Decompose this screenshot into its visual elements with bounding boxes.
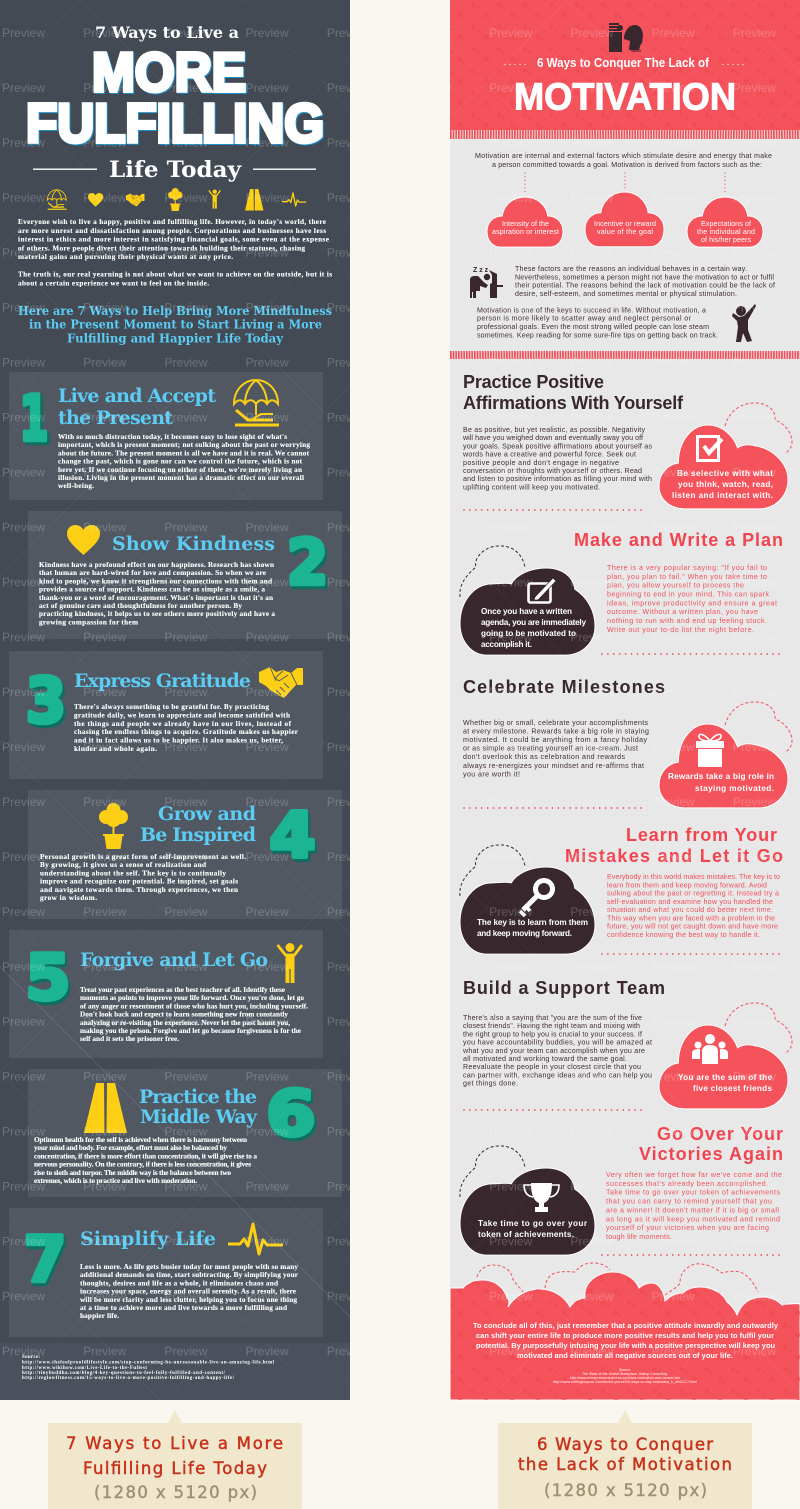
cloud callout (659, 403, 792, 509)
factors text (477, 265, 775, 339)
heading (565, 825, 783, 866)
icon: pulse (228, 1224, 283, 1254)
section: support team (462, 978, 792, 1110)
body text: Everybody in this world makes mistakes. The key is to (607, 873, 780, 881)
body text: are a winner! It doesn't matter if it is big or small (606, 1206, 779, 1214)
cloud callout: token of achievements. (478, 1230, 574, 1239)
cloud: expectations: of his/her peers (701, 236, 751, 244)
heading: Practice the (139, 1086, 257, 1108)
sources: http://www.wikihow.com/Live-Life-to-the-Fullest (22, 1366, 147, 1371)
body text: Write out your to-do list the night before. (607, 626, 754, 634)
title (505, 56, 746, 118)
intro text: material gains and pursuing their physical wants at any price. (18, 253, 233, 261)
cloud callout: Be selective with what (677, 469, 773, 478)
body text: beginning to end in your mind. This can spark (607, 590, 769, 598)
cloud callout: Once you have a written (481, 607, 572, 616)
icon: umbrella (234, 380, 279, 425)
body text: Treat your past experiences as the best teacher of all. Identify these (80, 986, 285, 994)
body text: making you the prison. Forgive and let go because forgiveness is for the (80, 1027, 301, 1035)
body text: situation and what you could do better next time. (607, 906, 773, 914)
footer clouds (450, 1263, 800, 1400)
body text: that human are hard-wired for love and compassion. So when we are (39, 569, 266, 577)
icon: heart (67, 525, 100, 555)
body text: Personal growth is a great form of self-improvement as well. (40, 853, 246, 861)
sources: Source: (22, 1355, 40, 1360)
body text: Less is more. As life gets busier today for most people with so many (80, 1263, 298, 1271)
caption: left: Fulfilling Life Today (83, 1459, 267, 1478)
cloud callout: You are the sum of the (678, 1073, 772, 1082)
body text: additional demands on time, start subtracting. By simplifying your (80, 1271, 299, 1279)
body text: Whether big or small, celebrate your accomplishments (463, 719, 648, 727)
sub heading: Here are 7 Ways to Help Bring More Mindfulness (18, 304, 332, 318)
cloud callout: Rewards take a big role in (668, 772, 774, 781)
sources: http://www.entrepreneurbusiness.com/lack-motivation-and-causes.htm (570, 1376, 680, 1380)
body text: will have you weighed down and eventually sway you off (462, 434, 643, 442)
icon: group of people (692, 1034, 728, 1064)
body text: Kindness have a profound effect on our happiness. Research has shown (39, 561, 274, 569)
body text: understanding about the self. The key is to continually (40, 869, 226, 877)
cloud: incentive: value of the goal (597, 228, 653, 236)
body text (463, 719, 649, 778)
conclusion text: potential. By purposefully infusing your life with a positive perspective will keep you (476, 1341, 775, 1350)
factors text: professional goals. Even the most strong willed people can lose steam (477, 323, 709, 331)
intro text: Everyone wish to live a happy, positive and fulfilling life. However, in today's world, there (18, 218, 326, 226)
icon: tree (99, 803, 128, 849)
body text: kind to people, we know it strengthens our connections with them and (39, 577, 272, 585)
sources: http://www.thefoolproofdlifestyle.com/stop-conforming-be-unreasonable-live-an-amazing-life.html (22, 1360, 275, 1366)
factors text: Nevertheless, sometimes a person might not have the motivation to act or fulfil (515, 273, 774, 281)
title: 6 Ways to Conquer The Lack of (537, 56, 710, 70)
cloud callout (460, 546, 595, 655)
cloud: expectations: the individual and (697, 228, 755, 236)
icon: jumping person (732, 304, 756, 342)
body text: increases your space, energy and overall serenity. As a result, there (80, 1288, 296, 1296)
cloud callout (659, 702, 792, 808)
body text: grow in wisdom. (40, 894, 97, 902)
body text: moments as points to improve your life forward. Once you're done, let go (80, 994, 304, 1002)
heading: Practice Positive (463, 372, 604, 392)
body text: get things done. (463, 1080, 518, 1088)
body text: There is a very popular saying: "If you fail to (607, 564, 767, 572)
title (26, 23, 325, 183)
cloud callout: staying motivated. (695, 784, 774, 793)
body text: There's also a saying that "you are the sum of the five (463, 1014, 642, 1022)
panel: step 7 (9, 1208, 323, 1337)
body text: Very often we forget how far we've come and the (606, 1171, 782, 1179)
caption: right (498, 1410, 752, 1509)
body text: With so much distraction today, it becomes easy to lose sight of what's (58, 433, 287, 441)
caption: left: (1280 x 5120 px) (94, 1483, 257, 1502)
factors text: their potential. The reasons behind the lack of motivation could be the lack of (515, 282, 775, 290)
body text: important, which is present moment; not sulking about the past or worrying (58, 441, 310, 449)
body text: all motivated and working toward the same goal. (463, 1055, 627, 1063)
caption: right: 6 Ways to Conquer (537, 1435, 713, 1454)
cloud: intensity (487, 197, 563, 247)
number 4: 4 (270, 799, 316, 872)
sources: Source: (619, 1368, 631, 1372)
icon: sleeping at desk: Z z z (473, 267, 489, 274)
body text: tough life moments. (606, 1233, 672, 1241)
number 5: 5 (28, 944, 72, 1017)
icon: person (278, 943, 302, 983)
body text: Optimum health for the self is achieved when there is harmony between (34, 1136, 247, 1144)
heading (463, 372, 684, 413)
body text (40, 853, 246, 902)
number 5: 5 (26, 941, 70, 1014)
number 6: 6 (266, 1077, 316, 1150)
body text: don't overlook this as celebration and rewards (463, 753, 625, 761)
body text: can partner with, exchange ideas and who can help you (463, 1071, 652, 1079)
body text: chasing the endless things to acquire. Gratitude makes us happier (74, 728, 299, 736)
number 3: 3 (28, 667, 68, 740)
sources: The State of the Global Workplace, Gallup Consulting (582, 1372, 667, 1376)
body text: the things and people we already have in our lives, instead of (74, 720, 292, 728)
sources (22, 1355, 275, 1381)
body text (607, 564, 777, 634)
header band (450, 0, 800, 139)
panel: step 4 (28, 790, 342, 919)
factor clouds (487, 173, 763, 247)
body text: and it in fact allows us to be happier. It also makes us, better, (74, 737, 283, 745)
heading: Grow and (158, 803, 256, 825)
body text: at every milestone. Rewards take a big role in staying (463, 728, 649, 736)
title: MORE (93, 42, 247, 104)
section: mistakes (460, 825, 783, 954)
body text: rise to sloth and torpor. The middle way is the balance between two (34, 1169, 231, 1177)
icon: handshake (259, 667, 303, 698)
heading: Build a Support Team (463, 978, 665, 998)
cloud: expectations: Expectations of (701, 220, 751, 228)
cloud: intensity: Intensity of the (502, 220, 549, 228)
factors text: sometimes. Keep reading for some sure-fire tips on getting back on track. (477, 331, 718, 339)
body text: act of genuine care and thoughtfulness for another person. By (39, 602, 242, 610)
sub heading (18, 304, 332, 346)
body text: self-evaluation and examine how you handled the (607, 898, 773, 906)
title: MORE (92, 41, 246, 103)
heading (139, 1086, 258, 1128)
panel: step 2 (28, 511, 342, 639)
body text: of any anger or resentment of those who has hurt you, including yourself. (80, 1002, 308, 1010)
body text: words have a creative and powerful force. Seek out (462, 451, 636, 459)
conclusion text: To conclude all of this, just remember that a positive attitude inwardly and outwardly (473, 1321, 779, 1330)
cloud callout (460, 1146, 595, 1255)
body text: kinder and whole again. (74, 745, 157, 753)
body text: what you and your team can accomplish when you are (462, 1047, 645, 1055)
body text: and listen to positive information as filling your mind with (463, 475, 652, 483)
body text: well-being. (58, 482, 94, 490)
factors text: desire, self-esteem, and sometimes mental or physical stimulation. (515, 290, 737, 298)
caption: right: the Lack of Motivation (518, 1455, 732, 1474)
cloud: intensity: aspiration or interest (492, 228, 559, 236)
body text: Reevaluate the people in your closest circle that you (463, 1063, 641, 1071)
body text: confidence knowing the best way to handle it. (607, 931, 760, 939)
body text: extremes, which is to practice and live with moderation. (34, 1177, 197, 1185)
body text (74, 703, 299, 753)
body text: and navigate towards them. Through experiences, we then (40, 886, 238, 894)
body text: about the future. The present moment is all we have and it is real. We cannot (58, 449, 310, 457)
icon: key (520, 880, 552, 916)
intro text: Motivation are internal and external factors which stimulate desire and energy that make (475, 152, 772, 160)
cloud: expectations (687, 197, 763, 247)
caption: left (48, 1410, 302, 1509)
body text (39, 561, 275, 626)
cloud callout: going to be motivated to (481, 629, 576, 638)
body text (462, 1014, 652, 1088)
number 3: 3 (26, 664, 66, 737)
body text: future, you will not get caught down and have more (607, 923, 778, 931)
caption: left: 7 Ways to Live a More (66, 1434, 283, 1453)
body text: will be more clarity and less clutter, helping you to focus one thing (80, 1296, 297, 1304)
body text: successes that's already been accomplished. (606, 1180, 768, 1188)
body text: gratitude daily, we learn to appreciate and become satisfied with (74, 711, 290, 719)
number 4: 4 (272, 802, 318, 875)
body text: your mind and body. For example, effort must also be balanced by (34, 1144, 227, 1152)
panel: motivation infographic (450, 0, 800, 1400)
intro text: are more unrest and dissatisfaction among people. Corporations and businesses have less (18, 227, 326, 235)
conclusion text (473, 1321, 779, 1360)
body text: By growing, it gives us a sense of realization and (40, 861, 206, 869)
title: FULFILLING (27, 93, 325, 155)
panel: step 1 (9, 372, 323, 500)
body text: concentration, if there is more effort than concentration, it will give rise to a (34, 1152, 257, 1160)
cloud callout: accomplish it. (481, 640, 532, 649)
sub heading: Fulfilling and Happier Life Today (67, 332, 284, 346)
body text (34, 1136, 257, 1185)
body text: at a time to achieve more and live towards a more fulfilling and (80, 1304, 287, 1312)
cloud callout: Take time to go over your (478, 1219, 588, 1228)
cloud callout: five closest friends (693, 1084, 772, 1093)
body text: analyzing or re-visiting the experience. Never let the past haunt you, (80, 1019, 290, 1027)
body text (606, 1171, 782, 1241)
section: plan (460, 530, 783, 655)
body text: nothing to run with and end up feeling stuck. (607, 617, 767, 625)
cloud callout: The key is to learn from them (477, 918, 588, 927)
body text: the right group to help you is crucial to your success. If (463, 1030, 642, 1038)
number 1: 1 (20, 382, 48, 455)
factors text: Motivation is one of the keys to succeed in life. Without motivation, a (477, 306, 706, 314)
title: MOTIVATION (514, 76, 736, 118)
heading: Show Kindness (112, 533, 275, 555)
cloud callout: agenda, you are immediately (481, 618, 586, 627)
body text: improve and recognize our potential. Be inspired, set goals (40, 878, 238, 886)
body text: closest friends". Having the right team and mixing with (463, 1022, 640, 1030)
body text: here yet. If we continue focusing on either of them, we're merely living an (58, 466, 302, 474)
heading (58, 385, 216, 429)
body text: as long as it will keep you motivated and remind (606, 1215, 780, 1223)
heading: Forgive and Let Go (80, 949, 268, 971)
body text: thank-you or a word of encouragement. What's important is that it's an (39, 594, 273, 602)
heading: Make and Write a Plan (574, 530, 783, 550)
cloud callout: listen and interact with. (672, 491, 773, 500)
body text: This way when you are faced with a problem in the (607, 914, 775, 922)
body text: There's always something to be grateful for. By practicing (74, 703, 269, 711)
number 7: 7 (26, 1226, 68, 1299)
intro text (18, 218, 332, 287)
body text: plan, you allow yourself to process the (607, 582, 744, 590)
cloud callout (659, 1003, 792, 1109)
body text (80, 1263, 299, 1320)
body text: nervous personality. On the contrary, if there is less concentration, it gives (34, 1161, 251, 1169)
body text: yourself of your victories when you are facing (606, 1224, 769, 1232)
sub heading: in the Present Moment to Start Living a More (29, 318, 322, 332)
heading: Express Gratitude (74, 670, 251, 692)
heading (140, 803, 256, 846)
number 7: 7 (24, 1223, 66, 1296)
body text: change the past, which is gone nor can we control the future, which is not (58, 458, 303, 466)
body text: your goals. Speak positive affirmations about yourself as (463, 442, 652, 450)
body text: always re-energizes your mindset and re-affirms that (463, 762, 644, 770)
heading: Be Inspired (140, 824, 256, 846)
body text: learn from them and keep moving forward. Avoid (607, 881, 767, 889)
body text: conversation or thoughts with yourself or others. Read (463, 467, 642, 475)
intro text: a person committed towards a goal. Motivation is derived from factors such as the: (492, 161, 762, 169)
body text: illusion. Living in the present moment has a dramatic effect on our overall (58, 474, 304, 482)
body text: Be as positive, but yet realistic, as possible. Negativity (463, 426, 645, 434)
heading: Affirmations With Yourself (463, 393, 684, 413)
body text: plan, you plan to fail." When you take time to (607, 573, 767, 581)
heading: Celebrate Milestones (463, 677, 665, 697)
sources: http://tinybuddha.com/blog/4-key-questions-to-feel-fully-fulfilled-and-content/ (22, 1371, 226, 1376)
cloud: incentive: Incentive or reward (594, 220, 656, 228)
section: milestones (463, 677, 792, 808)
heading (639, 1124, 783, 1164)
heading: Live and Accept (58, 385, 216, 407)
heading: Victories Again (639, 1144, 783, 1164)
heading: Learn from Your (626, 825, 777, 845)
heading: Middle Way (140, 1106, 258, 1128)
title: 7 Ways to Live a (95, 23, 239, 42)
title: Life Today (109, 157, 242, 183)
icon: person slumped at desk (609, 23, 643, 52)
section: affirmations (462, 372, 792, 510)
sources (553, 1368, 697, 1384)
sources: http://reglowfitness.com/15-ways-to-live-a-more-positive-fulfilling-and-happy-life/ (22, 1376, 235, 1381)
icon row (47, 188, 306, 211)
body text: that you can carry to remind yourself that you (606, 1198, 772, 1206)
icon: trophy (524, 1183, 559, 1212)
body text (58, 433, 310, 490)
panel: step 5 (9, 930, 323, 1058)
body text: self and it sets the prisoner free. (80, 1035, 179, 1043)
body text (462, 426, 652, 491)
intro text: The truth is, our real yearning is not about what we want to achieve on the outside, but it is (18, 270, 332, 278)
title: FULFILLING (26, 92, 324, 154)
cloud callout: you think, watch, read, (678, 480, 773, 489)
intro text: interest in ethics and more interest in satisfying financial goals, some even at the expense (18, 236, 329, 244)
body text: practicing kindness, it helps us to see others more positively and have a (39, 610, 275, 618)
body text: sulking about the past or regretting it. Instead try a (607, 890, 779, 898)
body text: happier life. (80, 1312, 119, 1320)
number 6: 6 (268, 1080, 318, 1153)
body text: Don't look back and expect to learn something new from constantly (80, 1011, 288, 1019)
panel: step 3 (9, 651, 323, 779)
icon: road (84, 1083, 127, 1133)
number 2: 2 (287, 526, 328, 599)
number 2: 2 (289, 529, 330, 602)
section: victories (460, 1124, 783, 1255)
heading: Simplify Life (80, 1228, 216, 1250)
icon: gift (696, 734, 724, 767)
body text: you are worth it! (463, 770, 520, 778)
body text: positive people and don't engage in negative (463, 459, 619, 467)
cloud: incentive (585, 192, 664, 247)
number 1: 1 (22, 385, 51, 458)
body text: ideas, improve productivity and ensure a great (607, 599, 777, 607)
body text (607, 873, 780, 939)
body text: provides a source of support. Kindness can be as simple as a smile, a (39, 586, 265, 594)
body text: Take time to go over your token of achievements (606, 1189, 780, 1197)
factors text: These factors are the reasons an individual behaves in a certain way. (515, 265, 747, 273)
icon: sleeping at desk (470, 267, 503, 298)
conclusion text: can shift your entire life to produce more positive results and help you to fulfil your (476, 1331, 774, 1340)
caption: right: (1280 x 5120 px) (544, 1481, 707, 1500)
icon: checkbox (698, 436, 722, 460)
heading: the Present (58, 407, 173, 429)
intro text (475, 152, 772, 169)
panel: 7 ways infographic (0, 0, 350, 1400)
body text: or as simple as treating yourself an ice-cream. Just (463, 745, 638, 753)
icon: pencil note (528, 578, 556, 602)
cloud callout (460, 845, 595, 954)
body text: uplifting content will keep you motivated. (463, 483, 600, 491)
factors text: person is more likely to scatter away and neglect personal or (477, 315, 692, 323)
heading: Go Over Your (657, 1124, 783, 1144)
body text: you have accountability buddies, you will be amazed at (463, 1039, 652, 1047)
body text: growing compassion for them (39, 618, 138, 626)
intro text: about a certain experience we want to feel on the inside. (18, 279, 209, 287)
heading: Mistakes and Let it Go (565, 846, 783, 866)
intro text: of others. More people divert their attention towards building their statuses, chasing (18, 244, 305, 252)
body text (80, 986, 308, 1043)
sources: http://www.huffingtonpost.com/doctor-pierce/15-ways-to-stay-motivated_b_4041377.html (553, 1380, 697, 1384)
body text: motivated. It could be anything from a fancy holiday (463, 736, 647, 744)
conclusion text: motivated and eliminate all negative sources out of your life. (517, 1351, 733, 1360)
body text: outcome. Without a written plan, you have (607, 608, 758, 616)
panel: step 6 (28, 1069, 342, 1197)
body text: thoughts, desires and life as a whole, it eliminates chaos and (80, 1279, 278, 1287)
cloud callout: and keep moving forward. (477, 929, 572, 938)
